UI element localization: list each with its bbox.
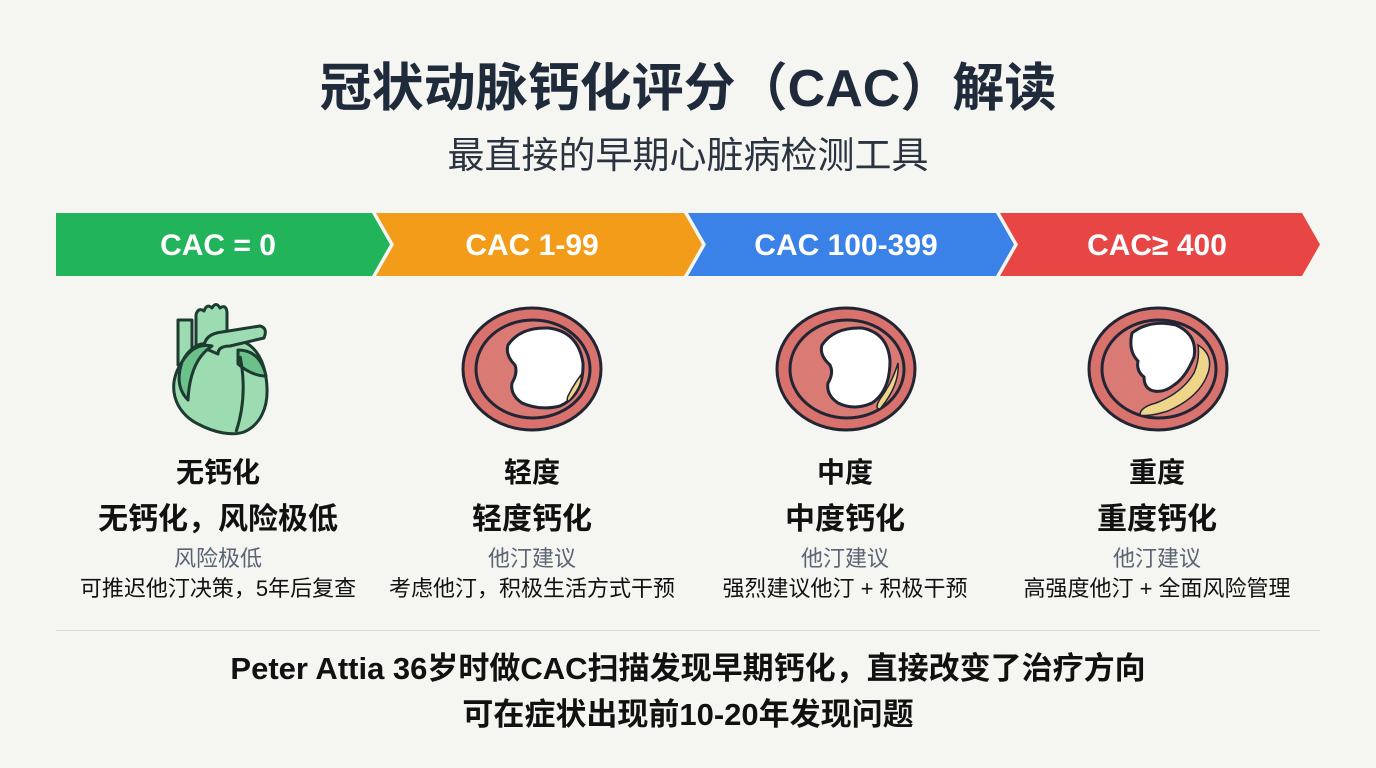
text column 4: 他汀建议	[1113, 546, 1201, 571]
text column 2: 他汀建议	[488, 546, 576, 571]
text column 4: 重度钙化	[1097, 503, 1217, 536]
text column 1: 可推迟他汀决策，5年后复查	[80, 576, 356, 601]
title: 冠状动脉钙化评分（CAC）解读	[320, 60, 1056, 118]
text column 4: 高强度他汀 + 全面风险管理	[1023, 576, 1291, 601]
chevron: CAC≥400	[1000, 213, 1320, 276]
footer text: 可在症状出现前10-20年发现问题	[462, 697, 914, 732]
text column 2	[389, 457, 675, 601]
chevron: CAC = 0: CAC = 0	[160, 229, 276, 262]
chevron: CAC 1-99: CAC 1-99	[465, 229, 599, 262]
text column 1: 风险极低	[174, 546, 262, 571]
text column 3: 中度钙化	[785, 503, 905, 536]
text column 2: 考虑他汀，积极生活方式干预	[389, 576, 675, 601]
chevron: CAC≥400: CAC≥ 400	[1087, 229, 1227, 262]
chevron: CAC 100-399: CAC 100-399	[754, 229, 938, 262]
text column 4	[1023, 457, 1291, 601]
footer text	[230, 651, 1146, 732]
text column 2: 轻度钙化	[472, 503, 592, 536]
text column 3	[722, 457, 968, 601]
chevron bar	[56, 213, 1320, 276]
icon: heart	[172, 303, 269, 436]
text column 2: 轻度	[504, 457, 560, 488]
chevron: CAC 1-99	[376, 213, 702, 276]
text column 1: 无钙化，风险极低	[98, 503, 338, 536]
chevron: CAC = 0	[56, 213, 390, 276]
chevron: CAC 100-399	[688, 213, 1014, 276]
icon: artery severe	[1088, 306, 1228, 432]
subtitle: 最直接的早期心脏病检测工具	[448, 135, 928, 176]
text column 4: 重度	[1129, 457, 1185, 488]
icon: artery mild	[462, 306, 602, 432]
footer text: Peter Attia 36岁时做CAC扫描发现早期钙化，直接改变了治疗方向	[230, 651, 1146, 686]
text column 1: 无钙化	[176, 457, 260, 488]
text column 1	[80, 457, 356, 601]
icon: artery moderate	[776, 306, 916, 432]
text column 3: 中度	[817, 457, 873, 488]
text column 3: 他汀建议	[801, 546, 889, 571]
text column 3: 强烈建议他汀 + 积极干预	[722, 576, 968, 601]
